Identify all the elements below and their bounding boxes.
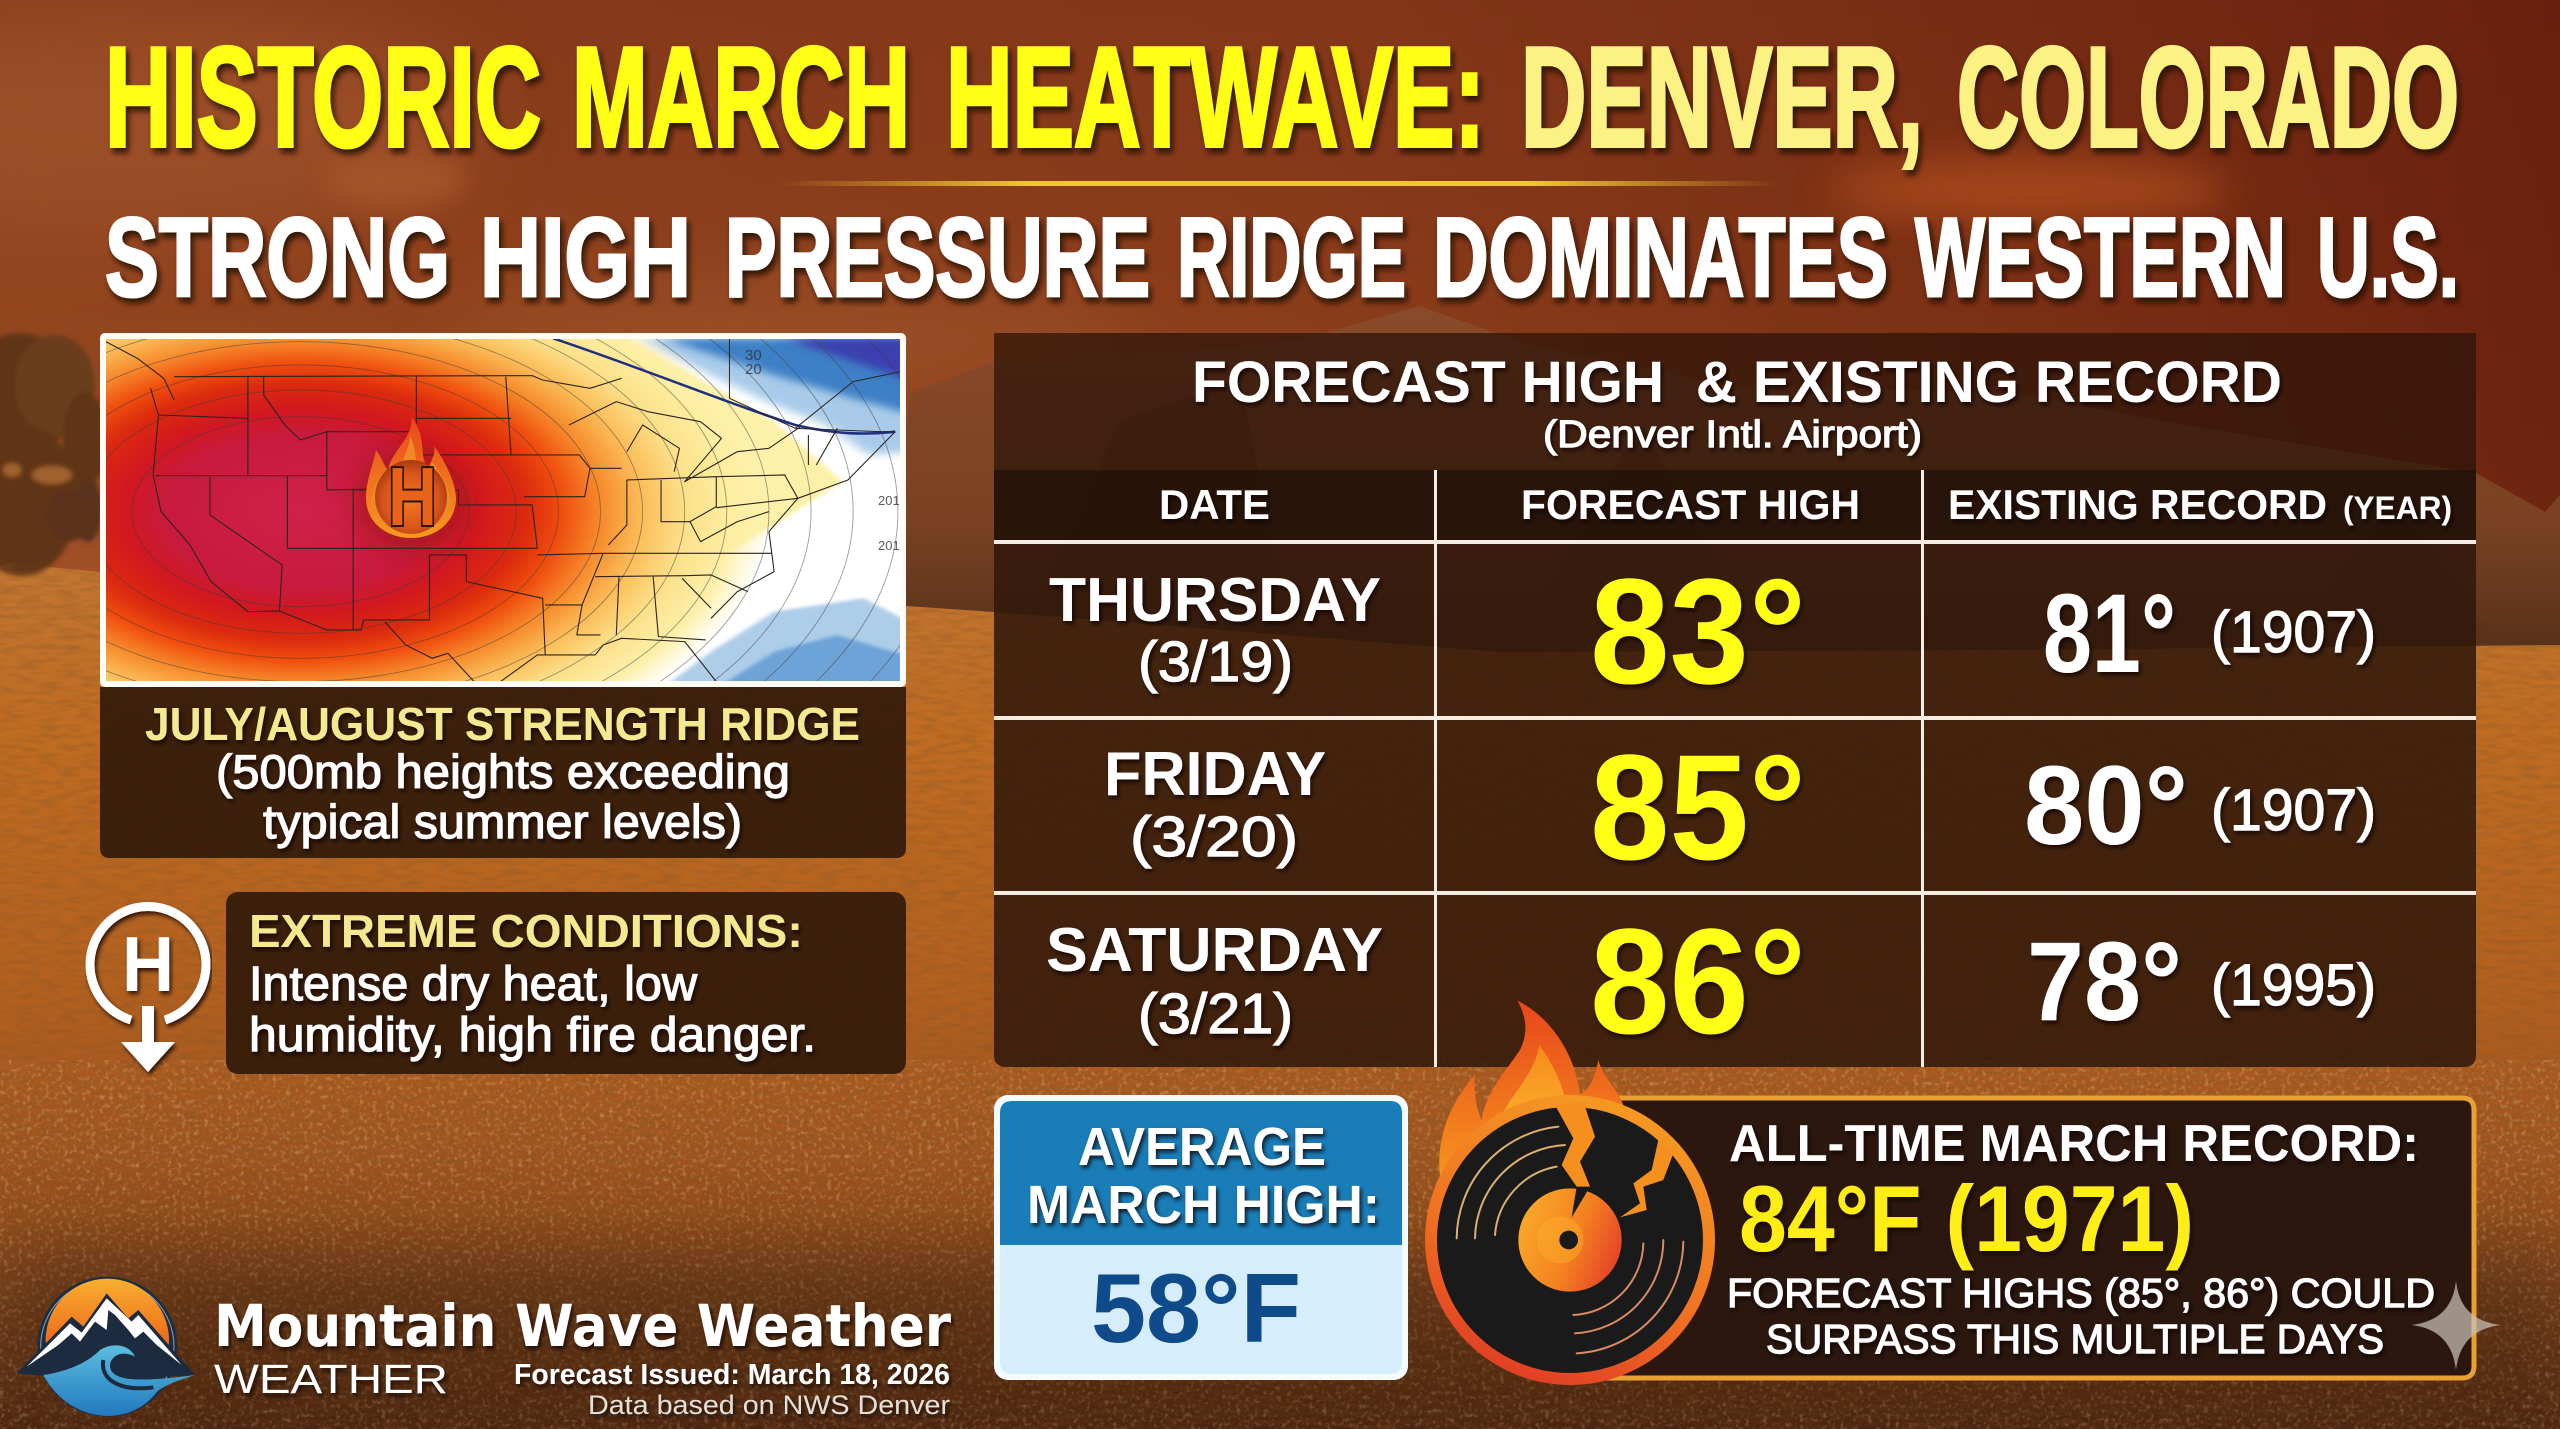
row: Saturday	[1046, 897, 2376, 1065]
row: Friday: (3/20)	[1130, 805, 1298, 869]
icon: Mountain Wave Weather logo	[17, 1277, 195, 1417]
row: Thursday: 83°	[1590, 547, 1806, 715]
brand text: Forecast Issued: March 18, 2026	[514, 1359, 950, 1391]
icon: high pressure H with down arrow: H	[122, 920, 174, 1008]
panel: all-time March record	[1600, 1098, 2474, 1378]
table grid	[994, 470, 2476, 1067]
column headers: EXISTING RECORD	[1948, 481, 2327, 528]
panel: 500mb heights map	[100, 333, 906, 687]
panel: extreme conditions: Intense dry heat, low	[249, 958, 697, 1011]
subtitle: STRONG	[105, 195, 450, 320]
row: Thursday	[1049, 547, 2376, 715]
row: Thursday: (1907)	[2211, 600, 2376, 665]
icon: flaming H marker: H	[388, 450, 437, 543]
panel: extreme conditions: humidity, high fire danger.	[249, 1009, 816, 1062]
record crack	[1555, 1102, 1595, 1217]
map contour labels: 20	[745, 361, 762, 378]
state and coast lines	[106, 338, 901, 682]
brand text: WEATHER	[214, 1356, 448, 1402]
table title: FORECAST HIGH & EXISTING RECORD	[1192, 350, 2282, 415]
panel: average March high: 58°F	[1091, 1253, 1301, 1363]
row: Thursday: 81°	[2043, 571, 2176, 696]
column headers	[1159, 481, 2452, 528]
panel: ridge caption: JULY/AUGUST STRENGTH RIDGE	[145, 698, 860, 750]
row: Saturday: (3/21)	[1138, 982, 1293, 1046]
panel: all-time March record: ALL-TIME MARCH RECORD:	[1729, 1115, 2419, 1173]
brand text: Mountain Wave Weather	[214, 1292, 951, 1360]
panel: forecast table	[994, 333, 2476, 1067]
title: HEATWAVE:	[946, 18, 1485, 177]
panel: all-time March record: SURPASS THIS MULTIPLE DAYS	[1766, 1316, 2384, 1362]
title: DENVER,	[1521, 18, 1923, 177]
icon: high pressure H with down arrow	[90, 907, 206, 1072]
column headers: FORECAST HIGH	[1521, 481, 1860, 528]
row: Thursday: THURSDAY	[1049, 566, 1381, 635]
panel: average March high: AVERAGE	[1078, 1117, 1326, 1177]
panel: ridge caption: (500mb heights exceeding	[216, 745, 790, 798]
brand text	[214, 1292, 951, 1420]
subtitle: WESTERN	[1915, 195, 2286, 320]
map contour labels	[745, 347, 907, 553]
panel: all-time March record: FORECAST HIGHS (85°, 86°) COULD	[1727, 1270, 2435, 1316]
panel: extreme conditions	[226, 892, 906, 1074]
subtitle: HIGH	[480, 195, 691, 320]
subtitle: U.S.	[2317, 195, 2459, 320]
row: Saturday: 86°	[1590, 897, 1806, 1065]
subtitle	[105, 195, 2459, 320]
table title	[1192, 350, 2282, 456]
row: Thursday: (3/19)	[1138, 630, 1293, 694]
icon: flaming H marker	[355, 417, 467, 550]
title: HISTORIC	[105, 18, 541, 177]
row: Friday: FRIDAY	[1104, 740, 1326, 809]
subtitle: DOMINATES	[1433, 195, 1888, 320]
height contours	[106, 339, 900, 681]
map contour labels: 2016	[878, 493, 907, 508]
map contour labels: 30	[745, 347, 762, 364]
row: Friday: 85°	[1590, 723, 1806, 891]
map contour labels: 2017	[878, 538, 907, 553]
divider line	[779, 181, 1779, 186]
column headers: DATE	[1159, 481, 1270, 528]
record grooves	[1457, 1127, 1683, 1353]
column headers: (YEAR)	[2343, 490, 2452, 526]
panel: ridge caption: typical summer levels)	[263, 795, 742, 848]
panel: extreme conditions: EXTREME CONDITIONS:	[249, 905, 803, 957]
brand text: Data based on NWS Denver	[588, 1390, 950, 1420]
row: Saturday: (1995)	[2211, 953, 2376, 1018]
title: MARCH	[572, 18, 910, 177]
title	[105, 18, 2459, 177]
panel: average March high: MARCH HIGH:	[1027, 1175, 1380, 1235]
row: Saturday: 78°	[2027, 919, 2182, 1044]
row: Friday	[1104, 723, 2376, 891]
icon: sparkle watermark	[2411, 1281, 2501, 1370]
subtitle: PRESSURE	[725, 195, 1150, 320]
row: Friday: (1907)	[2211, 778, 2376, 843]
row: Friday: 80°	[2024, 743, 2188, 868]
panel: ridge caption	[100, 687, 906, 858]
panel: average March high	[994, 1095, 1408, 1380]
panel: all-time March record: 84°F (1971)	[1739, 1166, 2194, 1271]
row: Saturday: SATURDAY	[1046, 916, 1383, 985]
icon: cracked flaming record	[1431, 1001, 1709, 1379]
subtitle: RIDGE	[1177, 195, 1406, 320]
table title: (Denver Intl. Airport)	[1543, 414, 1922, 456]
